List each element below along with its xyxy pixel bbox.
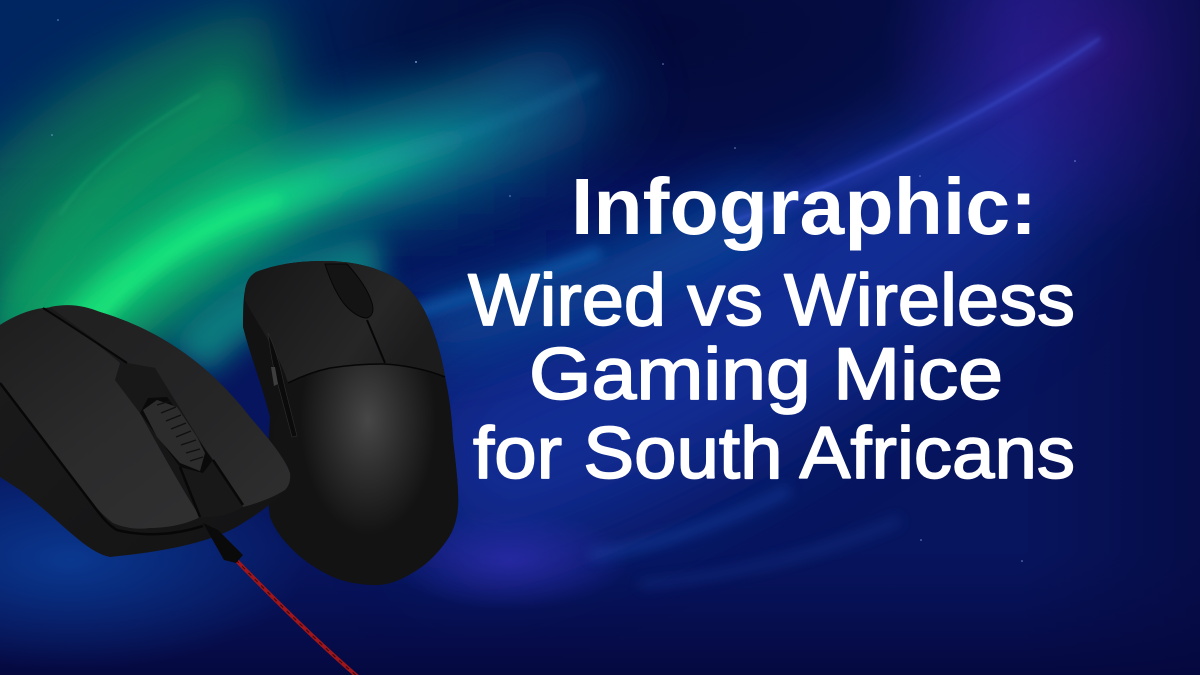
side buttons [268,333,297,437]
icon: wireless black mouse [243,261,458,585]
scroll wheel [143,400,205,471]
aurora: green band [0,50,640,370]
left button [0,308,200,529]
right button [50,305,290,507]
scroll wheel housing [140,397,213,473]
title line: Wired vs Wireless: Wired vs Wireless [468,260,1075,341]
centre channel [115,363,243,517]
stars [51,19,1076,562]
scroll wheel [325,264,373,318]
aurora: blue and purple streaks [590,38,1100,585]
title line: for South Africans: for South Africans [473,413,1075,494]
title line: Infographic: Infographic: [571,162,1037,251]
title line: Gaming Mice: Gaming Mice [529,334,1003,415]
cable strain relief [203,523,243,563]
icon: wired mouse red cable [236,560,358,675]
icon: wired black mouse [0,305,290,563]
title [468,162,1075,494]
